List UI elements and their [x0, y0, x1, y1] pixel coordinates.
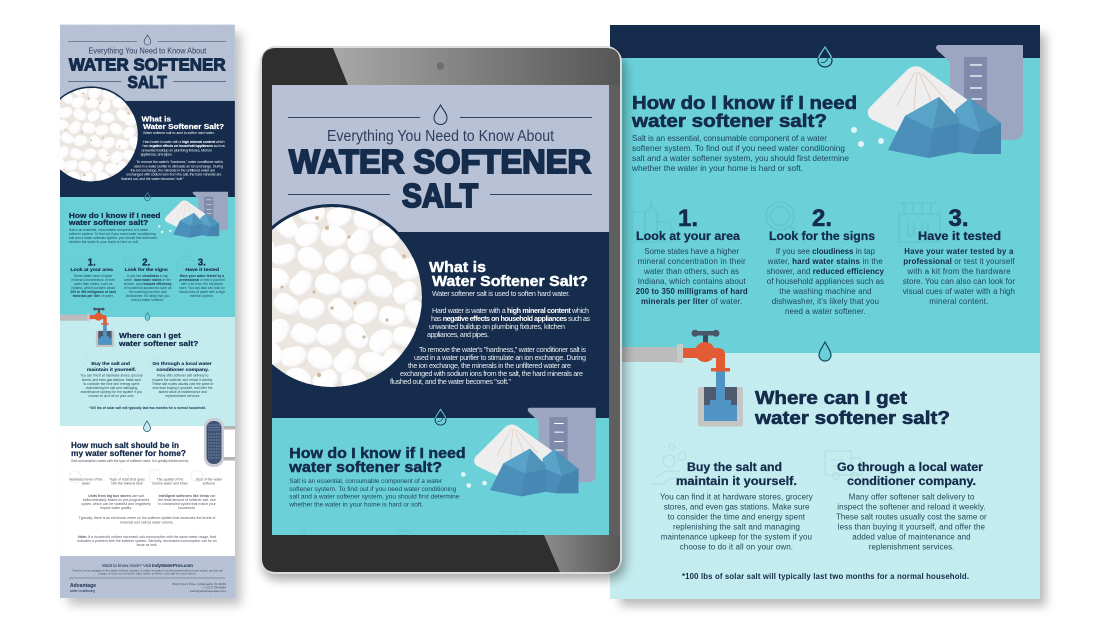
heading: how much salt — [71, 441, 189, 463]
text: four influence factors: Hardness level of the — [70, 478, 102, 482]
photo: salt pellets — [239, 200, 432, 397]
text: what is paragraphs: Water softener salt is used to soften hard water. — [432, 289, 570, 298]
step 3: have it tested — [903, 205, 1015, 306]
option: buy the salt: choose to do it all on your own. — [680, 542, 793, 552]
panel: footer: There's a lot to navigate in the water softener industry. Contact us today for a free assessment of your needs, and we are — [72, 568, 223, 572]
text: notes: Typically, there is an electronic meter on the softener system that measures the levels of — [79, 516, 215, 520]
panel: where can I get section — [610, 342, 1040, 599]
text: address: 5340 Victory Drive, Indianapolis, IN 46203 — [172, 582, 226, 586]
icon: section drop — [144, 421, 150, 432]
option: local water conditioner company: Go through a local water — [837, 462, 984, 474]
text: notes: Note: If a household notices increased salt consumption with the same water usage, that — [78, 535, 216, 539]
text: what is paragraphs: has negative effects on household appliances such as — [431, 314, 590, 323]
option: local water conditioner company: inspect the softener and reload it weekly. — [837, 502, 986, 512]
logo: Advantage water conditioning: water conditioning — [70, 589, 95, 593]
step 1: look at your area — [636, 205, 748, 306]
camera — [437, 62, 444, 70]
text: softener types: household. — [178, 506, 196, 510]
panel: footer: happy to help you find the right water softener and salt for your home. — [98, 571, 197, 575]
text: softener types: the least amount of softener salt, due — [158, 498, 216, 502]
icon: drop — [819, 342, 831, 361]
option: buy the salt: stores, and even gas stations. Make sure — [664, 502, 810, 512]
heading: how much salt: How much salt should be in — [71, 441, 179, 450]
top gloss — [333, 48, 620, 85]
option: local water conditioner company: conditioner company. — [847, 476, 976, 488]
step 2: look for the signs: of household appliances such as — [767, 277, 884, 286]
illustration: faucet filling glass — [610, 330, 743, 426]
text: address — [172, 583, 226, 592]
heading: how much salt: Salt consumption varies with the type of softener used. It is greatly influenced by: — [71, 459, 189, 463]
step 1: look at your area: water than others, such as — [643, 267, 739, 276]
navy top band — [610, 25, 1040, 58]
text: address: T: (317) 786-9884 — [203, 586, 226, 590]
heading: where can I get — [754, 387, 950, 428]
panel: how do I know section — [610, 45, 1040, 353]
icons: four influence factors — [69, 469, 203, 483]
step 2: look for the signs: shower, and reduced efficiency — [767, 267, 885, 276]
icon: hand with bubbles — [650, 444, 688, 484]
step 1: look at your area: Look at your area — [636, 231, 741, 243]
text: what is paragraphs: appliances, and pipes. — [427, 330, 489, 339]
text: what is paragraphs: used in a water purifier to stimulate an ion exchange. During — [414, 353, 586, 362]
step 3: have it tested: 3. — [948, 205, 969, 232]
option: local water conditioner company: Many offer softener salt delivery to — [849, 492, 975, 502]
heading and intro: how do I know — [631, 92, 857, 173]
heading: what is — [429, 259, 588, 290]
step 3: have it tested: with a kit from the hardware — [906, 267, 1011, 276]
text: softener types: Units from big box stores use salt — [88, 494, 144, 498]
heading and intro: how do I know: softener system. To find out if you need water conditioning — [632, 143, 845, 153]
text: four influence factors: Type of resin that goes — [109, 478, 145, 482]
step 3: have it tested: visual cues of water with a high — [903, 287, 1015, 296]
title text — [289, 128, 591, 215]
option: buy the salt — [660, 462, 813, 552]
option: local water conditioner company: less than buying it yourself, and offer the — [838, 522, 986, 532]
option: local water conditioner company: These salt routes usually cost the same or — [836, 512, 987, 522]
text: four influence factors: into the mineral tank — [111, 482, 143, 486]
text: four influence factors: water — [82, 482, 91, 486]
step 3: have it tested: professional or test it yourself — [903, 257, 1015, 266]
heading: where can I get: water softener salt? — [754, 407, 950, 428]
panel: how much salt section — [68, 418, 235, 546]
text: four influence factors — [70, 478, 222, 484]
text: four influence factors: The quality of the — [157, 478, 183, 482]
panel: long infographic thumbnail — [43, 24, 235, 598]
heading and intro: how do I know: salt and a water softener system, you should first determine — [632, 153, 849, 163]
logo: Advantage water conditioning: Advantage — [70, 583, 96, 589]
heading and intro: how do I know: How do I know if I need — [632, 92, 857, 113]
step 2: look for the signs: dishwasher, it's likely that you — [772, 297, 879, 306]
text: softener types: cycles, which can be wasteful and negatively — [81, 502, 151, 506]
step 1: look at your area: minerals per liter of water. — [641, 297, 742, 306]
option: buy the salt: replenishing the salt and managing — [673, 522, 800, 532]
step 1: look at your area: Some states have a higher — [644, 247, 739, 256]
step 1: look at your area: Indiana, which contains about — [638, 277, 746, 286]
heading: how much salt: my water softener for home? — [71, 449, 186, 458]
step 2: look for the signs — [767, 205, 885, 316]
step 1: look at your area: 200 to 350 milligrams of hard — [636, 287, 748, 296]
bottom gloss — [544, 535, 620, 572]
illustration: salt pile and beaker — [851, 45, 1023, 158]
text: notes — [77, 516, 217, 547]
heading and intro: how do I know: whether the water in your home is hard or soft. — [631, 163, 803, 173]
title text: Everything You Need to Know About — [327, 128, 555, 145]
text: what is paragraphs: To remove the water's "hardness," water conditioner salt is — [419, 345, 586, 354]
text: four influence factors: source water and timer — [152, 482, 189, 486]
option: buy the salt: You can find it at hardware stores, grocery — [660, 492, 813, 502]
text: four influence factors: Size of the water — [196, 478, 223, 482]
step 2: look for the signs: water, hard water stains in the — [767, 257, 883, 266]
text: what is paragraphs: flushed out, and the water becomes "soft." — [390, 377, 511, 386]
icons: city, magnifier and test strips — [632, 201, 940, 242]
step 3: have it tested: Have your water tested by a — [904, 247, 1014, 256]
text: softener types: to customized cycles that match your — [158, 502, 217, 506]
icon: drop — [818, 47, 832, 67]
text: what is paragraphs: unwanted buildup on plumbing fixtures, kitchen — [429, 322, 565, 331]
option: buy the salt: to consider the time and energy spent — [668, 512, 806, 522]
heading and intro: how do I know: water softener salt? — [631, 110, 827, 131]
option: buy the salt: maintain it yourself. — [676, 476, 797, 488]
text: notes: indicates a problem with the softener system. Similarly, decreased consumption can be an — [77, 539, 217, 543]
title text: WATER SOFTENER — [289, 144, 591, 181]
option: buy the salt: maintenance upkeep for the system if you — [661, 532, 812, 542]
step 3: have it tested: store. You can also can look for — [903, 277, 1015, 286]
tablet bezel — [261, 47, 621, 573]
text: softener types: indiscriminately based on pre-programmed — [83, 498, 149, 502]
text: notes: issue as well. — [137, 543, 157, 547]
panel: what is water softener salt — [239, 200, 609, 418]
text: notes: minerals and salt by water volume. — [120, 520, 174, 524]
step 2: look for the signs: need a water softener. — [785, 307, 866, 316]
panel: enlarged page detail — [610, 25, 1040, 599]
step 2: look for the signs: the washing machine and — [779, 287, 872, 296]
step 2: look for the signs: Look for the signs — [769, 231, 875, 243]
text: what is paragraphs: Hard water is water with a high mineral content which — [432, 306, 589, 315]
step 3: have it tested: Have it tested — [918, 231, 1001, 243]
option: local water conditioner company — [836, 462, 987, 552]
heading: where can I get: Where can I get — [755, 387, 907, 408]
option: buy the salt: Buy the salt and — [687, 462, 782, 474]
icon: softener tank — [204, 418, 235, 467]
step 2: look for the signs: 2. — [812, 205, 832, 232]
panel: title header — [272, 85, 609, 232]
step 1: look at your area: 1. — [678, 205, 698, 232]
text: what is paragraphs: the ion exchange, the minerals in the unfiltered water are — [408, 361, 571, 370]
footnote: *100 lbs of solar salt will typically last two months for a normal household. — [682, 572, 969, 581]
panel: how do I know section on screen — [272, 408, 609, 562]
step 3: have it tested: mineral content. — [929, 297, 988, 306]
option: local water conditioner company: replenishment services. — [869, 542, 954, 552]
text: address: sales@advantagewater.com — [190, 589, 227, 593]
panel: footer — [60, 556, 235, 598]
panel: footer: Want to know more? Visit IndyWaterPros.com — [102, 563, 193, 568]
text: four influence factors: softener — [203, 482, 216, 486]
step 1: look at your area: mineral concentration in their — [638, 257, 746, 266]
title text: SALT — [402, 178, 478, 215]
text: softener types — [81, 494, 217, 510]
step 2: look for the signs: If you see cloudiness in tap — [776, 247, 876, 256]
option: local water conditioner company: added value of maintenance and — [852, 532, 971, 542]
text: what is paragraphs — [390, 289, 590, 386]
heading and intro: how do I know: Salt is an essential, consumable component of a water — [632, 133, 827, 143]
text: what is paragraphs: exchanged with sodium ions from the salt, the hard minerals are — [400, 369, 583, 378]
text: softener types: Intelligent softeners like Vesta use — [159, 494, 215, 498]
heading: what is: Water Softener Salt? — [432, 273, 588, 290]
tablet screen — [272, 85, 609, 535]
icon: drop — [434, 105, 447, 124]
heading: what is: What is — [429, 259, 486, 276]
icon: delivery truck — [825, 451, 862, 480]
text: softener types: impact water quality. — [100, 506, 132, 510]
logo: Advantage water conditioning — [70, 583, 96, 593]
tablet device — [239, 47, 621, 573]
